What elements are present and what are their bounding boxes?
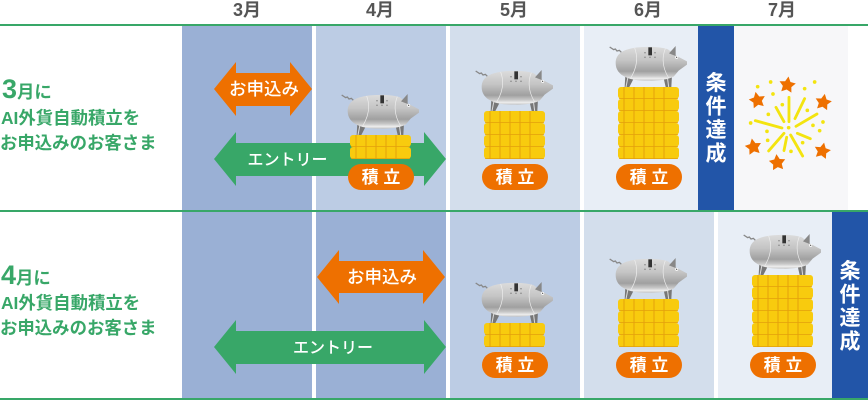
icon: fireworks [744, 75, 833, 170]
row 1 condition met band: 条 [706, 72, 726, 95]
row 2 application arrow: お申込み [347, 267, 417, 287]
row 2 June savings [610, 258, 687, 378]
row 1 condition met band [698, 26, 734, 210]
row 2 June savings: 積 立 [630, 356, 668, 375]
row 1 May savings: 積 立 [496, 168, 534, 187]
row 2 label [0, 260, 157, 338]
row 1 entry arrow: エントリー [247, 152, 328, 169]
month headings [233, 0, 796, 20]
row 1 June savings [610, 46, 687, 190]
row 1 condition met band: 達 [706, 119, 726, 142]
row 1 June savings: 積 立 [630, 168, 668, 187]
row 1 label: AI外貨自動積立を [1, 108, 140, 128]
row 2 entry arrow: エントリー [293, 340, 373, 357]
month headings: 6月 [634, 0, 662, 20]
row 2 label: AI外貨自動積立を [1, 293, 140, 313]
row 2 month columns [182, 212, 832, 398]
row 1 April savings: 積 立 [362, 168, 400, 187]
row 1 month columns [182, 26, 848, 210]
month headings: 5月 [500, 0, 528, 20]
row 2 label: お申込みのお客さま [0, 318, 157, 338]
row 2 July savings: 積 立 [764, 356, 802, 375]
month headings: 7月 [768, 0, 796, 20]
row 1 April savings [342, 94, 419, 190]
row 1 label: 3月に [2, 74, 52, 104]
row 1 condition met band: 成 [706, 142, 726, 166]
row 2 condition met band: 件 [840, 284, 860, 306]
row 1 application arrow [214, 62, 312, 116]
row 1 label: お申込みのお客さま [0, 133, 157, 153]
row 1 label [0, 74, 157, 153]
row 2 entry arrow [214, 320, 446, 374]
row 1 condition met band: 件 [706, 96, 726, 118]
row 2 condition met band: 達 [840, 307, 860, 330]
row 2 condition met band: 成 [840, 330, 860, 354]
row 2 May savings [476, 282, 553, 378]
month headings: 3月 [233, 0, 261, 20]
row 2 label: 4月に [1, 260, 51, 290]
row 2 July savings [744, 234, 821, 378]
row 2 condition met band [832, 212, 868, 398]
row 1 May savings [476, 70, 553, 190]
row 1 application arrow: お申込み [229, 79, 299, 99]
row 1 entry arrow [214, 132, 446, 186]
row 2 May savings: 積 立 [496, 356, 534, 375]
month headings: 4月 [366, 0, 394, 20]
row 2 application arrow [317, 250, 445, 304]
row 2 condition met band: 条 [840, 260, 860, 283]
